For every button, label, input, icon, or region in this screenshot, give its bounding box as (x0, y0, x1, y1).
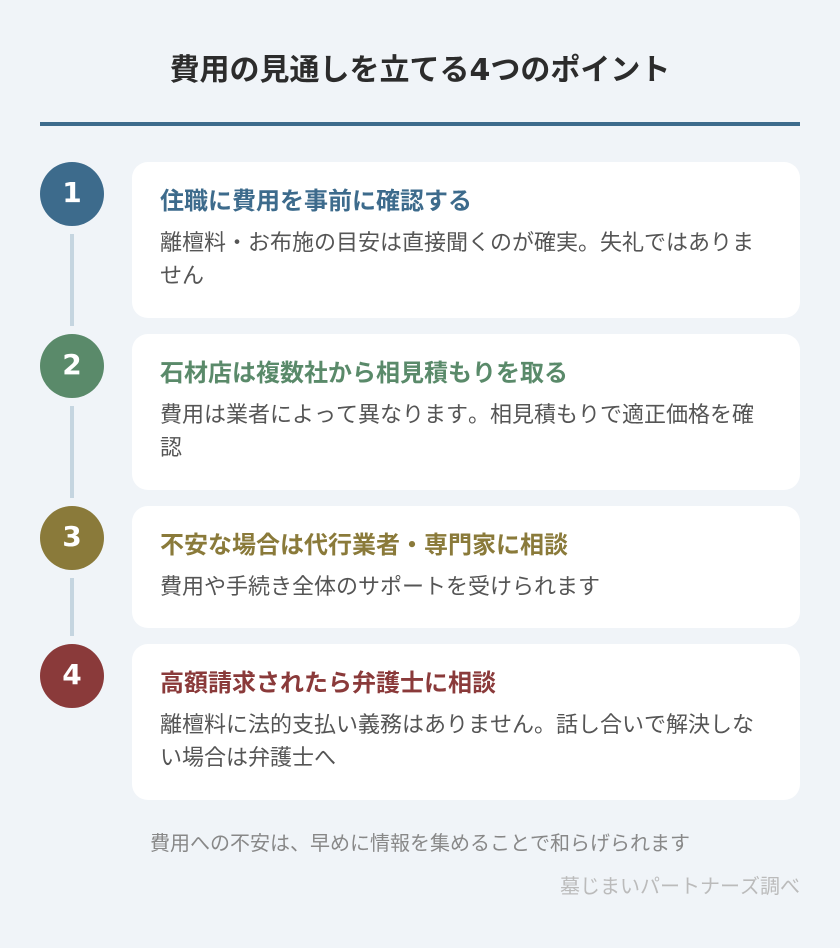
step 1 text: 離檀料・お布施の目安は直接聞くのが確実。失礼ではありま (160, 231, 754, 256)
source credit: 墓じまいパートナーズ調べ (560, 874, 800, 898)
step 1 text (160, 231, 754, 289)
panel: step 3 (132, 506, 800, 628)
step 3 heading: 不安な場合は代行業者・専門家に相談 (160, 531, 568, 559)
step 4 text (160, 713, 754, 771)
panel: step 4 (132, 644, 800, 800)
step 4 text: い場合は弁護士へ (160, 746, 336, 771)
step 4 number: 4 (62, 658, 82, 691)
step 2 number (40, 334, 104, 398)
step 3 number (40, 506, 104, 570)
step 2 heading: 石材店は複数社から相見積もりを取る (160, 359, 568, 387)
step 1 heading: 住職に費用を事前に確認する (160, 187, 472, 215)
step 2 text: 認 (160, 436, 182, 461)
step 2 text: 費用は業者によって異なります。相見積もりで適正価格を確 (160, 403, 754, 428)
step 3 number: 3 (62, 520, 82, 553)
connector 3 to 4 (70, 578, 74, 636)
step 1 number: 1 (62, 176, 82, 209)
step 2 text (160, 403, 754, 461)
title rule (40, 122, 800, 126)
step 4 heading: 高額請求されたら弁護士に相談 (160, 669, 496, 697)
panel: step 2 (132, 334, 800, 490)
connector 1 to 2 (70, 234, 74, 326)
step 1 text: せん (160, 264, 204, 289)
step 2 number: 2 (62, 348, 82, 381)
connector 2 to 3 (70, 406, 74, 498)
step 3 text: 費用や手続き全体のサポートを受けられます (160, 575, 600, 600)
step 1 number (40, 162, 104, 226)
closing note: 費用への不安は、早めに情報を集めることで和らげられます (150, 831, 690, 855)
title: 費用の見通しを立てる4つのポイント (170, 53, 670, 88)
panel: step 1 (132, 162, 800, 318)
step 4 number (40, 644, 104, 708)
step 4 text: 離檀料に法的支払い義務はありません。話し合いで解決しな (160, 713, 754, 738)
